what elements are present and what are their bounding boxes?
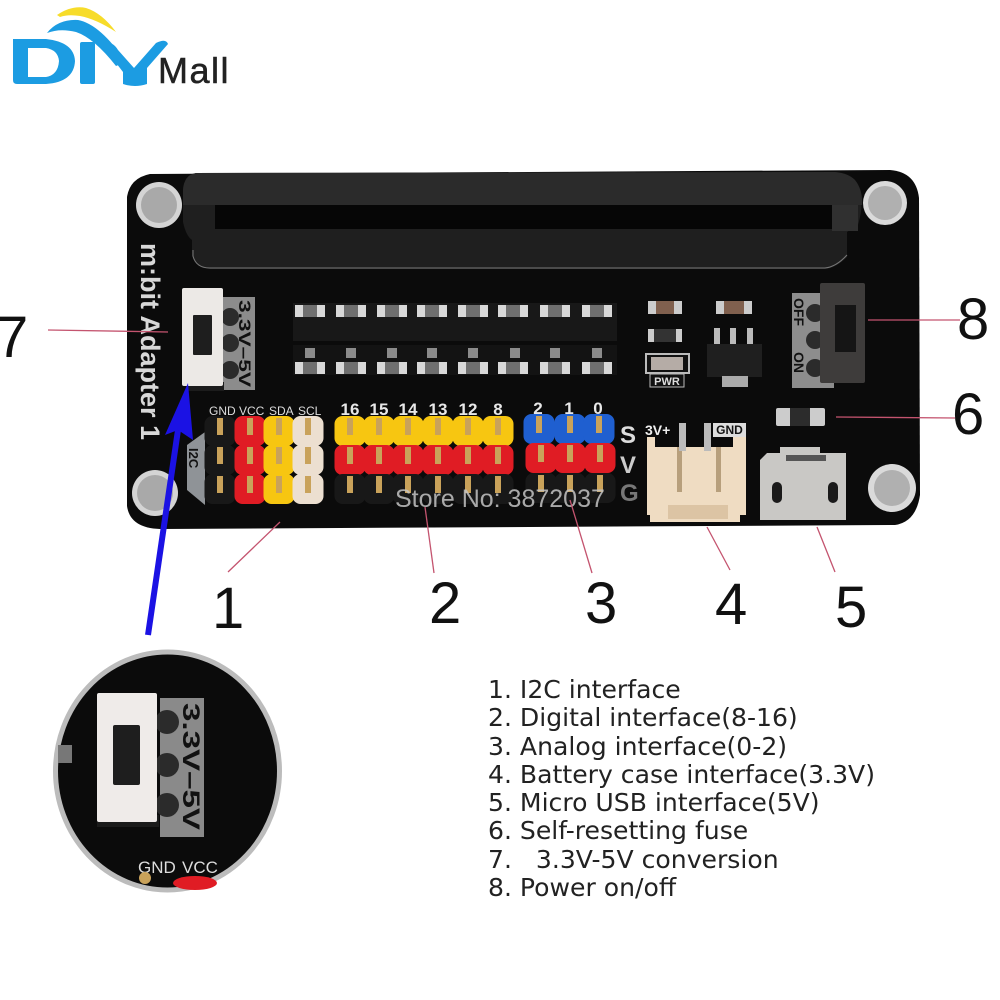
inset zoom circle: 3.3V–5V — [177, 703, 204, 830]
number 6: 6 — [952, 382, 984, 447]
logo: Mall — [158, 50, 230, 91]
mounting hole bottom left — [132, 470, 178, 516]
smd component rows — [293, 303, 617, 375]
i2c header pins: VCC — [239, 404, 265, 418]
fuse — [776, 408, 825, 426]
analog header pins: 0 — [593, 399, 603, 418]
logo — [13, 7, 230, 91]
mounting hole bottom right — [868, 464, 916, 512]
power switch: OFF — [791, 298, 807, 326]
board title: m:bit Adapter 1 — [135, 243, 165, 440]
analog header pins — [524, 399, 639, 507]
number 3: 3 — [585, 571, 617, 636]
analog header pins: V — [620, 452, 636, 479]
callout line 8 — [868, 319, 960, 321]
digital header pins: 16 — [341, 400, 359, 419]
blue arrow — [148, 383, 193, 635]
digital header pins — [334, 400, 514, 504]
callout line 7 — [48, 330, 168, 332]
inset zoom circle: GND — [138, 858, 176, 877]
feature list: 1. I2C interface 2. Digital interface(8-16) 3. Analog interface(0-2) 4. Battery case interface(3.3V) 5. Micro USB interface(5V) 6. Self-resetting fuse 7. 3.3V-5V conversion 8. Power on/off — [488, 675, 875, 902]
circuit board — [127, 170, 920, 529]
digital header pins: 14 — [399, 400, 418, 419]
digital header pins: 8 — [493, 400, 503, 419]
digital header pins: 13 — [429, 400, 447, 419]
digital header pins: 12 — [459, 400, 477, 419]
mounting hole top left — [136, 182, 182, 228]
analog header pins: S — [620, 422, 636, 449]
battery connector: 3V+ — [645, 422, 670, 438]
callout line 4 — [707, 527, 730, 570]
inset zoom circle: VCC — [182, 858, 218, 877]
callout line 3 — [570, 500, 592, 573]
power components — [646, 301, 762, 388]
number 4: 4 — [715, 572, 747, 637]
number 1: 1 — [212, 576, 244, 641]
inset zoom circle — [56, 652, 280, 890]
callout line 5 — [817, 527, 835, 572]
power components: PWR — [654, 376, 680, 388]
i2c header pins: SCL — [298, 404, 322, 418]
callout line 1 — [228, 522, 280, 572]
i2c header pins: I2C — [186, 448, 201, 469]
voltage switch — [182, 288, 255, 391]
analog header pins: 1 — [564, 399, 574, 418]
i2c header pins: GND — [209, 404, 236, 418]
micro usb port — [760, 447, 846, 520]
i2c header pins — [186, 404, 324, 505]
number 2: 2 — [429, 571, 461, 636]
voltage switch: 3.3V–5V — [235, 300, 254, 388]
watermark: Store No: 3872037 — [395, 485, 605, 513]
analog header pins: G — [620, 480, 639, 507]
digital header pins: 15 — [370, 400, 388, 419]
power switch — [791, 283, 865, 388]
number 8: 8 — [957, 287, 989, 352]
callout line 2 — [425, 507, 434, 573]
power switch: ON — [791, 352, 807, 373]
number 5: 5 — [835, 575, 867, 640]
battery connector: GND — [716, 423, 743, 437]
edge connector — [183, 172, 862, 269]
mounting hole top right — [863, 181, 907, 225]
analog header pins: 2 — [533, 399, 543, 418]
i2c header pins: SDA — [269, 404, 294, 418]
callout line 6 — [836, 417, 955, 418]
battery connector — [645, 422, 746, 522]
